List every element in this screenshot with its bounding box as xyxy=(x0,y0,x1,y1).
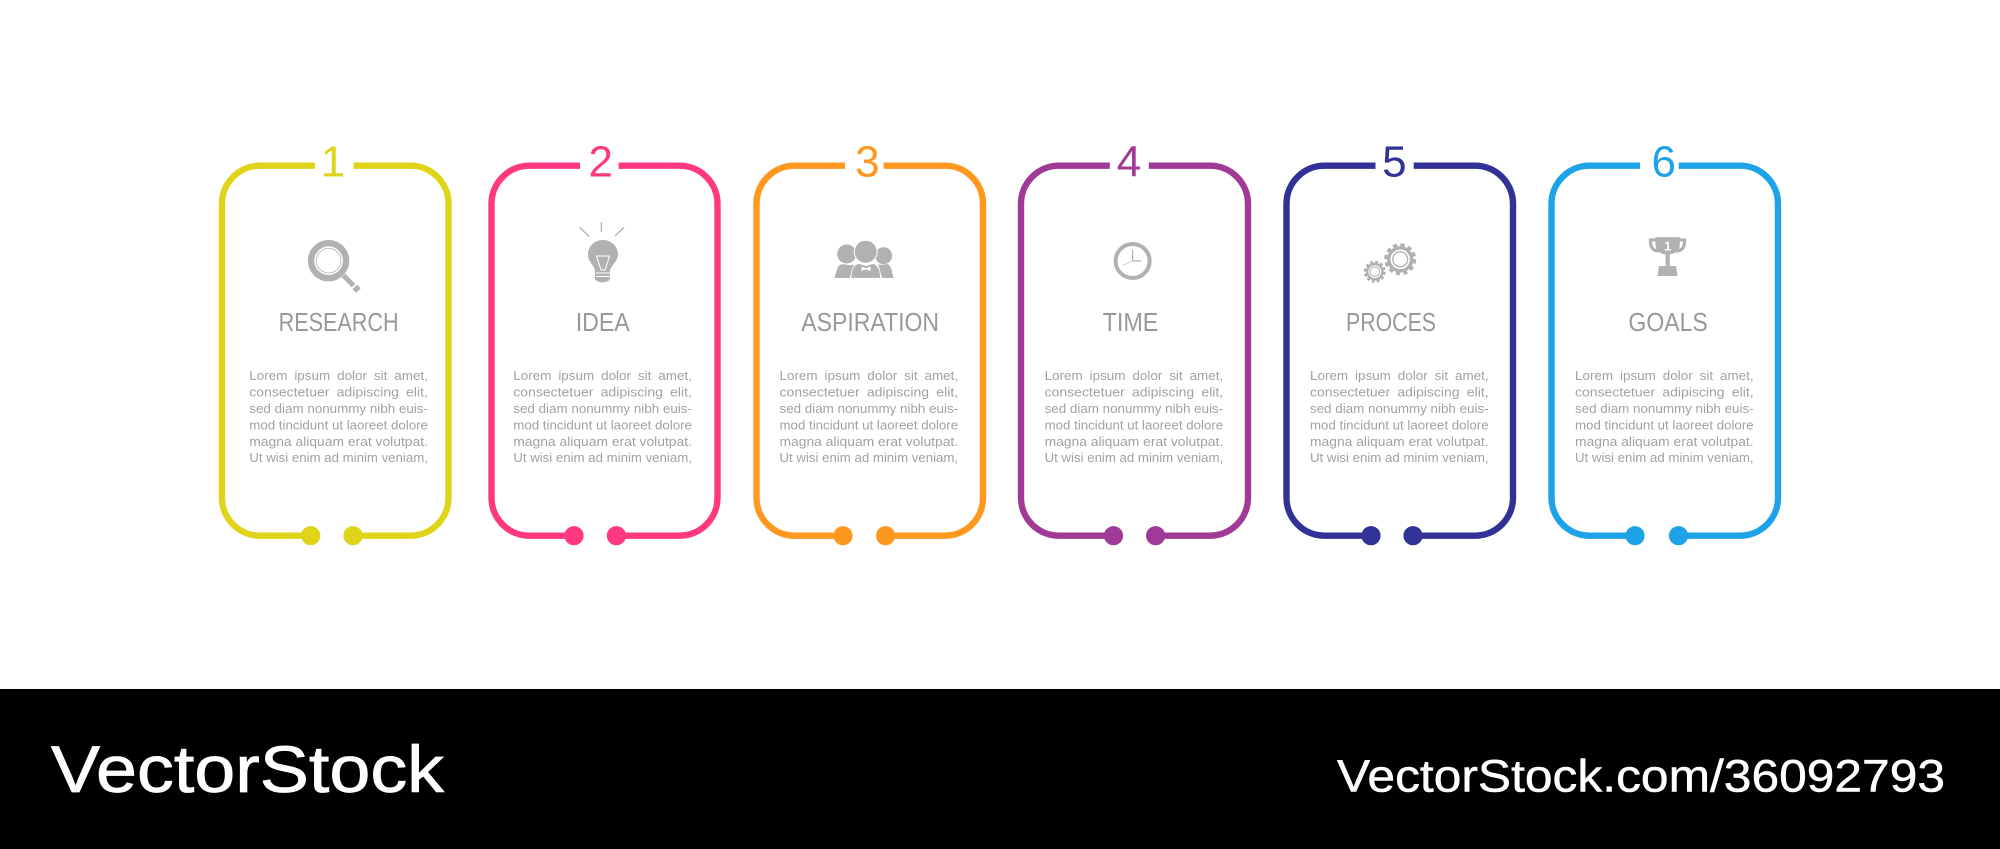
text block 6 xyxy=(1575,369,1754,465)
text block 3: Ut wisi enim ad minim veniam, xyxy=(780,451,958,465)
text block 1: Lorem ipsum dolor sit amet, xyxy=(249,369,428,383)
card outline 2 xyxy=(492,166,718,536)
footer url text: VectorStock.com/36092793 xyxy=(1337,750,1945,802)
number 3: 3 xyxy=(855,138,880,187)
panel: step 4 time xyxy=(1021,138,1248,545)
text block 5: Ut wisi enim ad minim veniam, xyxy=(1310,451,1489,465)
heading: aspiration: ASPIRATION xyxy=(801,309,939,337)
icon: group of people xyxy=(834,240,894,278)
connector dots 1 xyxy=(301,526,363,545)
text block 3 xyxy=(780,369,958,465)
text block 1: sed diam nonummy nibh euis- xyxy=(249,402,428,416)
heading: goals: GOALS xyxy=(1628,309,1708,337)
number 4: 4 xyxy=(1117,138,1141,187)
panel: step 3 aspiration xyxy=(756,138,983,545)
text block 3: sed diam nonummy nibh euis- xyxy=(780,402,958,416)
connector dots 4 xyxy=(1104,526,1165,545)
text block 1: Ut wisi enim ad minim veniam, xyxy=(249,451,428,465)
text block 6: Lorem ipsum dolor sit amet, xyxy=(1575,369,1754,383)
text block 2: Lorem ipsum dolor sit amet, xyxy=(513,369,692,383)
panel: step 2 idea xyxy=(492,138,718,545)
text block 1: mod tincidunt ut laoreet dolore xyxy=(249,418,428,432)
text block 2: magna aliquam erat volutpat. xyxy=(513,435,692,449)
card outline 5 xyxy=(1286,166,1513,536)
connector dots 5 xyxy=(1361,526,1423,545)
text block 6: mod tincidunt ut laoreet dolore xyxy=(1575,418,1754,432)
heading: research: RESEARCH xyxy=(279,309,399,337)
icon: trophy: 1 xyxy=(1664,238,1671,254)
text block 4: Lorem ipsum dolor sit amet, xyxy=(1045,369,1223,383)
text block 4: mod tincidunt ut laoreet dolore xyxy=(1045,418,1223,432)
card outline 3 xyxy=(756,166,983,536)
card outline 6 xyxy=(1552,166,1778,536)
text block 2 xyxy=(513,369,692,465)
heading: idea: IDEA xyxy=(576,309,630,337)
text block 6: consectetuer adipiscing elit, xyxy=(1575,386,1754,400)
icon: clock xyxy=(1116,244,1150,278)
connector dots 3 xyxy=(833,526,895,545)
text block 5: mod tincidunt ut laoreet dolore xyxy=(1310,418,1489,432)
text block 1: magna aliquam erat volutpat. xyxy=(249,435,428,449)
number 2: 2 xyxy=(588,138,613,187)
card outline 4 xyxy=(1021,166,1248,536)
panel: step 6 goals xyxy=(1552,138,1778,545)
footer logo text: VectorStock xyxy=(51,732,445,806)
card outline 1 xyxy=(222,166,448,536)
panel: step 1 research xyxy=(222,138,448,545)
heading: time: TIME xyxy=(1103,309,1158,337)
text block 4 xyxy=(1045,369,1223,465)
text block 6: sed diam nonummy nibh euis- xyxy=(1575,402,1754,416)
text block 5 xyxy=(1310,369,1489,465)
text block 2: consectetuer adipiscing elit, xyxy=(513,386,692,400)
icon: magnifying glass xyxy=(311,243,358,291)
text block 3: Lorem ipsum dolor sit amet, xyxy=(780,369,958,383)
footer band xyxy=(0,689,2000,849)
text block 4: consectetuer adipiscing elit, xyxy=(1045,386,1223,400)
text block 6: Ut wisi enim ad minim veniam, xyxy=(1575,451,1754,465)
number 1: 1 xyxy=(321,138,345,187)
panel: step 5 proces xyxy=(1286,138,1513,545)
text block 3: consectetuer adipiscing elit, xyxy=(780,386,958,400)
text block 1: consectetuer adipiscing elit, xyxy=(249,386,428,400)
icon: light bulb xyxy=(580,222,624,282)
connector dots 2 xyxy=(564,526,626,545)
text block 2: Ut wisi enim ad minim veniam, xyxy=(513,451,692,465)
icon: gears xyxy=(1365,245,1414,281)
text block 5: consectetuer adipiscing elit, xyxy=(1310,386,1489,400)
text block 5: sed diam nonummy nibh euis- xyxy=(1310,402,1489,416)
text block 3: magna aliquam erat volutpat. xyxy=(780,435,958,449)
connector dots 6 xyxy=(1625,526,1688,545)
text block 4: Ut wisi enim ad minim veniam, xyxy=(1045,451,1223,465)
text block 2: mod tincidunt ut laoreet dolore xyxy=(513,418,692,432)
heading: proces: PROCES xyxy=(1346,309,1436,337)
text block 1 xyxy=(249,369,428,465)
text block 4: magna aliquam erat volutpat. xyxy=(1045,435,1223,449)
text block 6: magna aliquam erat volutpat. xyxy=(1575,435,1754,449)
text block 5: Lorem ipsum dolor sit amet, xyxy=(1310,369,1489,383)
text block 2: sed diam nonummy nibh euis- xyxy=(513,402,692,416)
number 5: 5 xyxy=(1382,138,1407,187)
text block 5: magna aliquam erat volutpat. xyxy=(1310,435,1489,449)
icon: trophy xyxy=(1650,237,1685,276)
text block 3: mod tincidunt ut laoreet dolore xyxy=(780,418,958,432)
text block 4: sed diam nonummy nibh euis- xyxy=(1045,402,1223,416)
number 6: 6 xyxy=(1652,138,1676,187)
